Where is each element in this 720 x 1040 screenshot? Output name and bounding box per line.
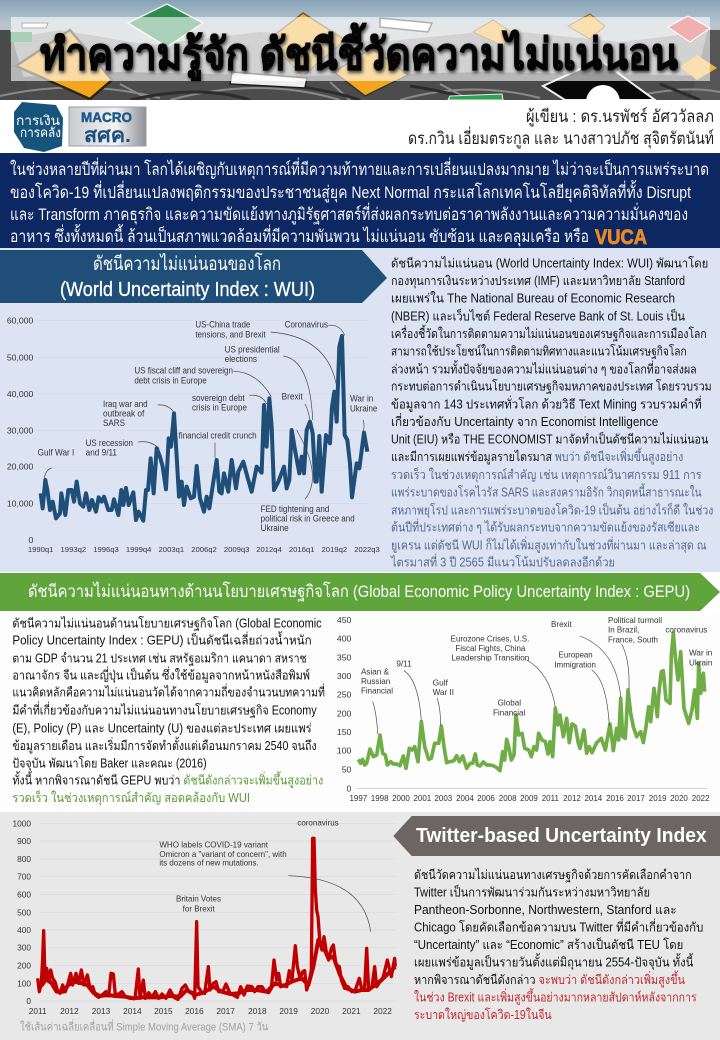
annotation labels: its dozens of new mutations. bbox=[159, 857, 259, 867]
annotation labels: Brexit bbox=[282, 391, 303, 401]
y axis labels: 60,000 bbox=[7, 316, 34, 326]
y axis labels: 200 bbox=[17, 961, 31, 971]
text block: WUI description: เผยแพร่ใน The National Bureau of Economic Research bbox=[391, 292, 675, 306]
x axis labels bbox=[28, 545, 380, 554]
y axis labels: 150 bbox=[337, 727, 352, 737]
heading arrow: Twitter bbox=[393, 816, 720, 856]
logo: MACRO สศค.: MACRO bbox=[81, 109, 132, 125]
annotation labels: coronavirus bbox=[297, 818, 339, 828]
title band bbox=[11, 17, 710, 81]
annotation labels: Coronavirus bbox=[285, 320, 328, 330]
annotation labels: sovereign debt bbox=[192, 393, 245, 403]
annotation labels: Ukraine bbox=[261, 523, 289, 533]
annotation labels: France, South bbox=[608, 634, 658, 644]
annotation labels: Russian bbox=[361, 676, 390, 686]
x axis labels bbox=[29, 1006, 392, 1016]
annotation labels: elections bbox=[225, 354, 257, 364]
logo: การเงินการคลัง: การเงิน bbox=[16, 113, 60, 128]
panel: GEPU background bbox=[0, 611, 720, 812]
text block: GEPU description bbox=[12, 615, 325, 806]
logo: MACRO สศค. bbox=[69, 107, 146, 147]
text block: GEPU description: ทั้งนี้ หากพิจารณาดัชนี GEPU พบว่า ดัชนีดังกล่าวจะเพิ่มขึ้นสูงอย่าง bbox=[12, 771, 323, 789]
x axis labels: 2018 bbox=[248, 1006, 267, 1016]
annotation labels: SARS bbox=[103, 418, 125, 428]
x axis labels: 2012 bbox=[563, 794, 581, 803]
y axis labels: 30,000 bbox=[7, 425, 34, 435]
annotation labels: political risk in Greece and bbox=[261, 513, 355, 523]
x axis labels: 1990q1 bbox=[28, 545, 53, 554]
annotation labels: US presidential bbox=[225, 345, 280, 355]
y axis labels: 200 bbox=[337, 708, 352, 718]
y axis labels: 0 bbox=[29, 535, 34, 545]
y axis labels: 100 bbox=[17, 978, 31, 988]
annotation labels: WHO labels COVID-19 variant bbox=[159, 839, 269, 849]
annotation labels: Asian & bbox=[361, 666, 389, 676]
logo: การเงินการคลัง bbox=[14, 102, 63, 152]
y axis labels: 0 bbox=[26, 996, 31, 1006]
line chart: Twitter-based uncertainty bbox=[12, 818, 395, 1034]
x axis labels: 2016q1 bbox=[289, 545, 314, 554]
heading arrow: WUI: ดัชนีความไม่แน่นอนของโลก bbox=[93, 252, 281, 275]
y axis labels: 400 bbox=[17, 925, 31, 935]
text block: WUI description: เกี่ยวข้องกับ Uncertainty จาก Economist Intelligence bbox=[391, 413, 658, 429]
x axis labels: 2012 bbox=[60, 1006, 79, 1016]
y axis labels: 450 bbox=[337, 615, 352, 625]
x axis labels: 2009q3 bbox=[224, 545, 249, 554]
annotation labels bbox=[38, 320, 377, 533]
text block: WUI description: ไตรมาสที่ 3 ปี 2565 มีแนวโน้มปรับลดลงอีกด้วย bbox=[390, 554, 615, 570]
x axis labels: 2019 bbox=[649, 794, 667, 803]
x axis labels: 2022q3 bbox=[354, 545, 380, 554]
y axis labels: 700 bbox=[17, 872, 31, 882]
annotation labels: crisis in Europe bbox=[192, 403, 247, 413]
text block: Twitter description: เผยแพร่ข้อมูลเป็นรายวันตั้งแต่มิถุนายน 2554-ปัจจุบัน ทั้งนี้ bbox=[414, 953, 694, 971]
x axis labels: 2016 bbox=[606, 794, 624, 803]
annotation leader line bbox=[288, 876, 371, 932]
x axis labels: 2019q2 bbox=[322, 545, 347, 554]
x axis labels: 2022 bbox=[692, 794, 710, 803]
x axis labels: 2009 bbox=[520, 794, 538, 803]
y axis labels: 900 bbox=[17, 836, 31, 846]
text block: WUI description: และมีการเผยแพร่ข้อมูลรายไตรมาส พบว่า ดัชนีจะเพิ่มขึ้นสูงอย่าง bbox=[391, 447, 683, 465]
heading arrow: GEPU bbox=[0, 573, 720, 611]
x axis labels: 1998 bbox=[371, 794, 389, 803]
annotation labels: outbreak of bbox=[103, 409, 145, 419]
annotation labels: Global bbox=[498, 698, 521, 708]
annotation labels: In Brazil, bbox=[608, 625, 639, 635]
annotation labels: Brexit bbox=[551, 619, 572, 629]
chart note: ใช้เส้นค่าเฉลี่ยเคลื่อนที่ Simple Moving Average (SMA) 7 วัน bbox=[20, 1019, 269, 1034]
text block: Twitter description bbox=[414, 868, 703, 1022]
x axis labels: 2014 bbox=[123, 1006, 142, 1016]
WUI data line bbox=[41, 336, 367, 521]
y axis labels: 600 bbox=[17, 889, 31, 899]
y axis labels: 300 bbox=[337, 671, 352, 681]
panel: introduction: อาหาร ซึ่งทั้งหมดนี้ ล้วนเป็นสภาพแวดล้อมที่มีความพันพวน ไม่แน่นอน ซับซ้อน และคลุมเครือ หรือ bbox=[10, 224, 589, 247]
line chart: GEPU bbox=[337, 615, 713, 803]
annotation labels bbox=[361, 615, 713, 717]
y axis labels: 10,000 bbox=[7, 498, 34, 508]
x axis labels: 2004 bbox=[456, 794, 474, 803]
x axis labels: 1996q3 bbox=[93, 545, 119, 554]
annotation labels: coronavirus bbox=[665, 625, 708, 635]
x axis labels: 2019 bbox=[279, 1006, 298, 1016]
annotation labels: financial credit crunch bbox=[179, 431, 257, 441]
text block: GEPU description: แนวคิดหลักคือความไม่แน่นอนวัดได้จากความถี่ของจำนวนบทความที่ bbox=[12, 684, 325, 700]
x axis labels: 1997 bbox=[349, 794, 368, 803]
heading arrow: WUI: (World Uncertainty Index : WUI) bbox=[60, 279, 315, 301]
annotation labels: Iraq war and bbox=[103, 399, 148, 409]
y axis labels bbox=[7, 316, 34, 545]
x axis labels: 2011 bbox=[542, 794, 559, 803]
annotation labels: Omicron a "variant of concern", with bbox=[159, 849, 287, 859]
x axis labels: 2000 bbox=[392, 794, 410, 803]
annotation leader lines bbox=[44, 325, 364, 499]
annotation labels: Financial bbox=[493, 707, 525, 717]
x axis labels: 2017 bbox=[216, 1006, 235, 1016]
annotation labels: Financial bbox=[361, 686, 393, 696]
annotation labels: Immigration bbox=[554, 659, 596, 669]
y axis labels: 300 bbox=[17, 943, 31, 953]
text block: Twitter description: “Uncertainty” และ “Economic” สร้างเป็นดัชนี TEU โดย bbox=[414, 937, 683, 952]
annotation labels: Fiscal Fights, China bbox=[455, 643, 525, 653]
annotation labels: US-China trade bbox=[195, 320, 250, 330]
y axis labels: 400 bbox=[337, 634, 352, 644]
x axis labels: 2003q1 bbox=[159, 545, 184, 554]
text block: GEPU description: ปัจจุบัน พัฒนาโดย Baker และคณะ (2016) bbox=[12, 755, 207, 771]
line chart: WUI bbox=[7, 316, 380, 554]
x axis labels: 2008 bbox=[499, 794, 517, 803]
panel: world uncertainty index bbox=[0, 248, 720, 572]
panel: introduction bbox=[0, 153, 720, 249]
x axis labels bbox=[349, 794, 710, 803]
annotation labels: FED tightening and bbox=[261, 504, 329, 514]
GEPU data line bbox=[358, 633, 705, 771]
y axis labels bbox=[12, 818, 31, 1006]
heading arrow: Twitter: Twitter-based Uncertainty Index bbox=[416, 825, 707, 847]
text block: GEPU description: (E), Policy (P) และ Uncertainty (U) ของแต่ละประเทศ เผยแพร่ bbox=[12, 721, 312, 735]
annotation labels: US fiscal cliff and sovereign bbox=[134, 366, 233, 376]
y axis labels: 250 bbox=[337, 690, 352, 700]
text block: GEPU description: Policy Uncertainty Index : GEPU) เป็นดัชนีเฉลี่ยถ่วงน้ำหนัก bbox=[12, 631, 312, 648]
text block: WUI description bbox=[390, 256, 713, 570]
Twitter data: dense low band bbox=[38, 940, 395, 998]
annotation labels: debt crisis in Europe bbox=[134, 375, 207, 385]
y axis labels: 50,000 bbox=[7, 352, 34, 362]
y axis labels: 20,000 bbox=[7, 462, 34, 472]
annotation labels: Ukraine bbox=[350, 403, 377, 413]
annotation labels: Eurozone Crises, U.S. bbox=[451, 633, 529, 643]
annotation labels: Gulf War I bbox=[38, 448, 74, 458]
y axis labels: 0 bbox=[347, 783, 352, 793]
text block: WUI description: (NBER) และเว็บไซต์ Federal Reserve Bank of St. Louis เป็น bbox=[391, 308, 685, 323]
x axis labels: 2016 bbox=[185, 1006, 204, 1016]
x axis labels: 2011 bbox=[29, 1006, 47, 1016]
text block: GEPU description: รวดเร็ว ในช่วงเหตุการณ์สำคัญ สอดคล้องกับ WUI bbox=[12, 790, 250, 806]
panel: Twitter background bbox=[0, 812, 720, 1040]
header photo of road signs bbox=[0, 0, 720, 100]
annotation labels: 9/11 bbox=[396, 659, 412, 669]
text block: Twitter description: หากพิจารณาดัชนีดังกล่าว จะพบว่า ดัชนีดังกล่าวเพิ่มสูงขึ้น bbox=[414, 970, 685, 988]
x axis labels: 2015 bbox=[154, 1006, 173, 1016]
Twitter data line bbox=[38, 838, 395, 999]
y axis labels bbox=[337, 615, 352, 793]
x axis labels: 2020 bbox=[670, 794, 688, 803]
x axis labels: 2017 bbox=[627, 794, 645, 803]
x axis labels: 2001 bbox=[413, 794, 432, 803]
y axis labels: 350 bbox=[337, 652, 352, 662]
annotation labels bbox=[159, 818, 339, 913]
annotation labels: US recession bbox=[86, 438, 133, 448]
text block: GEPU description: ตาม GDP จำนวน 21 ประเทศ เช่น สหรัฐอเมริกา แคนาดา สหราช bbox=[12, 651, 307, 666]
x axis labels: 2022 bbox=[373, 1006, 392, 1016]
annotation labels: War in bbox=[689, 648, 712, 658]
text block: Twitter description: Twitter เป็นการพัฒนาร่วมกันระหว่างมหาวิทยาลัย bbox=[414, 885, 650, 900]
x axis labels: 1993q2 bbox=[61, 545, 86, 554]
annotation labels: Leadership Transition bbox=[451, 653, 529, 663]
annotation labels: Political turmoil bbox=[608, 615, 662, 625]
heading arrow: WUI bbox=[0, 250, 387, 303]
annotation labels: European bbox=[559, 650, 593, 660]
VUCA highlight: VUCA bbox=[595, 226, 647, 249]
annotation labels: Britain Votes bbox=[176, 894, 221, 904]
logo: MACRO สศค.: สศค. bbox=[84, 125, 131, 147]
x axis labels: 2014 bbox=[584, 794, 603, 803]
x axis labels: 2020 bbox=[311, 1006, 330, 1016]
x axis labels: 1999q4 bbox=[126, 545, 152, 554]
text block: GEPU description: ข้อมูลรายเดือน และเริ่มมีการจัดทำตั้งแต่เดือนมกราคม 2540 จนถึง bbox=[12, 736, 317, 754]
text block: GEPU description: ดัชนีความไม่แน่นอนด้านนโยบายเศรษฐกิจโลก (Global Economic bbox=[12, 615, 322, 631]
x axis labels: 2006 bbox=[477, 794, 495, 803]
annotation labels: Gulf bbox=[433, 677, 449, 687]
text block: Twitter description: ระบาดใหญ่ของโควิด-19ในจีน bbox=[414, 1007, 552, 1022]
logo: การเงินการคลัง: การคลัง bbox=[20, 125, 61, 140]
text block: GEPU description: อาณาจักร จีน และญี่ปุ่น เป็นต้น ซึ่งใช้ข้อมูลจากหน้าหนังสือพิมพ์ bbox=[12, 667, 310, 684]
x axis labels: 2021 bbox=[342, 1006, 361, 1016]
annotation labels: for Brexit bbox=[183, 903, 215, 913]
annotation labels: War in bbox=[350, 394, 373, 404]
annotation labels: and 9/11 bbox=[86, 447, 117, 457]
y axis labels: 50 bbox=[342, 765, 352, 775]
y axis labels: 100 bbox=[337, 746, 352, 756]
y axis labels: 800 bbox=[17, 854, 31, 864]
text block: GEPU description: มีคำที่เกี่ยวข้องกับความไม่แน่นอนทางนโยบายเศรษฐกิจ Economy bbox=[12, 702, 317, 719]
y axis labels: 40,000 bbox=[7, 389, 34, 399]
y axis labels: 1000 bbox=[12, 818, 31, 828]
authors bbox=[408, 107, 714, 149]
annotation leader lines bbox=[373, 636, 629, 734]
x axis labels: 2006q2 bbox=[191, 545, 217, 554]
text block: Twitter description: Pantheon-Sorbonne, Northwestern, Stanford และ bbox=[414, 903, 677, 917]
y axis labels: 500 bbox=[17, 907, 31, 917]
annotation labels: tensions, and Brexit bbox=[195, 329, 266, 339]
x axis labels: 2012q4 bbox=[256, 545, 283, 554]
annotation labels: Ukrain bbox=[689, 657, 713, 667]
x axis labels: 2013 bbox=[92, 1006, 111, 1016]
annotation labels: War II bbox=[433, 687, 454, 697]
x axis labels: 2003 bbox=[434, 794, 453, 803]
